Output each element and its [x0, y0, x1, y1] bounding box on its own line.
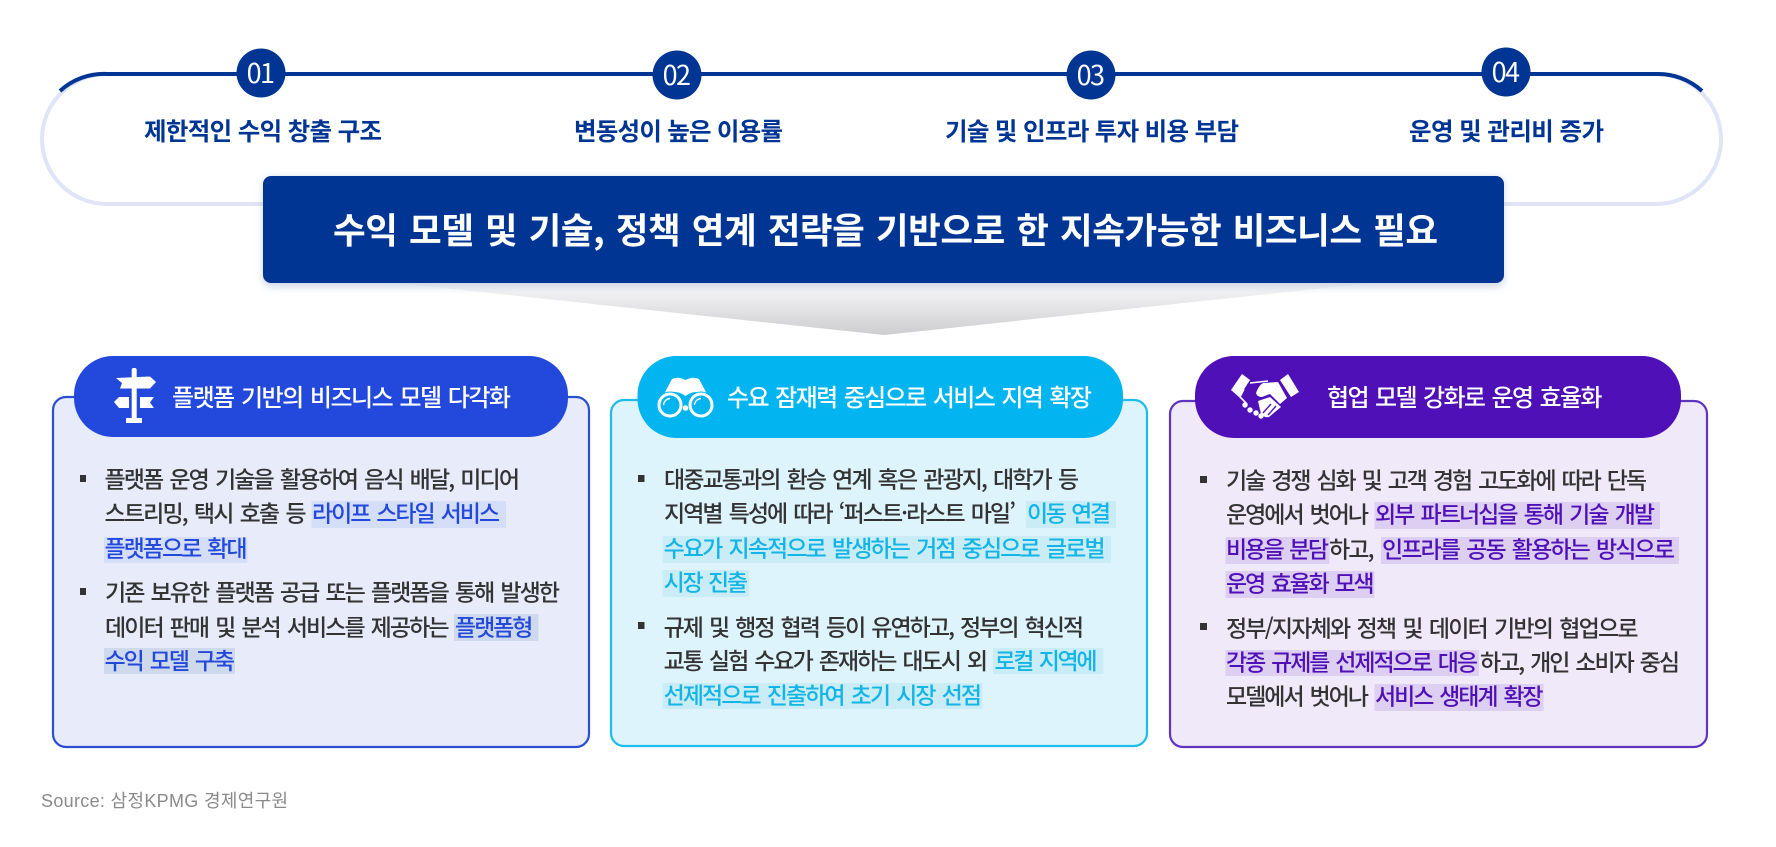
- step 01: 01: [247, 52, 274, 91]
- bullet text: platform 1: 플랫폼으로 확대: [104, 530, 248, 564]
- bullet text: collaboration 1: 외부 파트너십을 통해 기술 개발: [1375, 496, 1655, 530]
- bullet text: collaboration 1: 운영에서 벗어나: [1226, 496, 1369, 530]
- step 04: 04: [1492, 51, 1520, 90]
- bullet text: regional 1: [638, 460, 1116, 598]
- panel header: platform: [74, 356, 568, 437]
- source note: Source: 삼정KPMG 경제연구원: [41, 791, 288, 811]
- bullet text: platform 2: 기존 보유한 플랫폼 공급 또는 플랫폼을 통해 발생한: [105, 574, 560, 608]
- panel: demand-driven regional expansion: [611, 356, 1147, 746]
- arrow: funnel wedge pointing down: [396, 283, 1372, 335]
- process capsule frame: [42, 74, 1721, 204]
- bullet text: regional 1: 지역별 특성에 따라 ‘퍼스트·라스트 마일’: [664, 494, 1016, 528]
- bullet text: collaboration 1: [1200, 462, 1679, 598]
- bullet text: regional 1: 시장 진출: [664, 564, 748, 598]
- banner: key message: [263, 176, 1504, 287]
- bullet text: regional 2: 규제 및 행정 협력 등이 유연하고, 정부의 혁신적: [664, 608, 1084, 642]
- panel header: collaboration: [1195, 356, 1681, 438]
- bullet text: regional 1: 수요가 지속적으로 발생하는 거점 중심으로 글로벌: [664, 530, 1106, 564]
- bullet text: collaboration 2: 정부/지자체와 정책 및 데이터 기반의 협업으로: [1226, 610, 1638, 644]
- panel: platform diversification: [53, 356, 589, 747]
- bullet text: regional 2: 교통 실험 수요가 존재하는 대도시 외: [664, 642, 988, 676]
- step 03: [945, 50, 1239, 148]
- bullet text: regional 1: 대중교통과의 환승 연계 혹은 관광지, 대학가 등: [664, 460, 1079, 494]
- step 01: [144, 48, 382, 148]
- bullet text: collaboration 1: 기술 경쟁 심화 및 고객 경험 고도화에 따라 단독: [1226, 462, 1647, 496]
- panel header: collaboration: 협업 모델 강화로 운영 효율화: [1327, 378, 1602, 413]
- step 04: [1409, 48, 1604, 148]
- icon: signpost: [114, 368, 156, 423]
- bullet text: regional 2: 선제적으로 진출하여 초기 시장 선점: [664, 676, 982, 710]
- panel: collaboration model: [1170, 356, 1707, 747]
- bullet text: collaboration 2: 모델에서 벗어나: [1226, 678, 1369, 712]
- bullet text: platform 2: [80, 574, 560, 676]
- panel header: regional expansion: 수요 잠재력 중심으로 서비스 지역 확장: [727, 378, 1092, 413]
- bullet text: platform 1: 플랫폼 운영 기술을 활용하여 음식 배달, 미디어: [104, 460, 520, 494]
- banner: key message: 수익 모델 및 기술, 정책 연계 전략을 기반으로 한 지속가능한 비즈니스 필요: [333, 203, 1438, 254]
- bullet text: collaboration 2: 서비스 생태계 확장: [1375, 678, 1544, 712]
- bullet text: collaboration 1: 하고,: [1329, 530, 1374, 564]
- bullet text: platform 2: 수익 모델 구축: [104, 642, 235, 676]
- bullet text: platform 1: 스트리밍, 택시 호출 등: [104, 494, 306, 528]
- step 01: 제한적인 수익 창출 구조: [144, 113, 382, 148]
- step 02: [574, 50, 783, 148]
- panel header: platform: 플랫폼 기반의 비즈니스 모델 다각화: [172, 378, 511, 413]
- bullet text: platform 1: [80, 460, 520, 564]
- step 04: 운영 및 관리비 증가: [1409, 113, 1604, 148]
- bullet text: regional 2: 로컬 지역에: [994, 642, 1098, 676]
- bullet text: collaboration 2: [1200, 610, 1680, 712]
- bullet text: collaboration 1: 운영 효율화 모색: [1226, 564, 1374, 598]
- icon: handshake: [1231, 374, 1299, 419]
- bullet text: collaboration 2: 하고, 개인 소비자 중심: [1480, 644, 1680, 678]
- step 03: 기술 및 인프라 투자 비용 부담: [945, 113, 1239, 148]
- step 02: 02: [663, 54, 690, 93]
- icon: binoculars: [657, 378, 714, 418]
- bullet text: regional 2: [638, 608, 1104, 710]
- bullet text: platform 2: 플랫폼형: [455, 608, 533, 642]
- panel header: regional expansion: [638, 356, 1123, 438]
- bullet text: platform 2: 데이터 판매 및 분석 서비스를 제공하는: [105, 608, 450, 642]
- bullet text: platform 1: 라이프 스타일 서비스: [312, 494, 500, 528]
- bullet text: collaboration 2: 각종 규제를 선제적으로 대응: [1226, 644, 1478, 678]
- step 02: 변동성이 높은 이용률: [574, 113, 783, 148]
- step 03: 03: [1077, 54, 1104, 93]
- bullet text: regional 1: 이동 연결: [1027, 494, 1111, 528]
- bullet text: collaboration 1: 비용을 분담: [1226, 530, 1329, 564]
- bullet text: collaboration 1: 인프라를 공동 활용하는 방식으로: [1382, 530, 1675, 564]
